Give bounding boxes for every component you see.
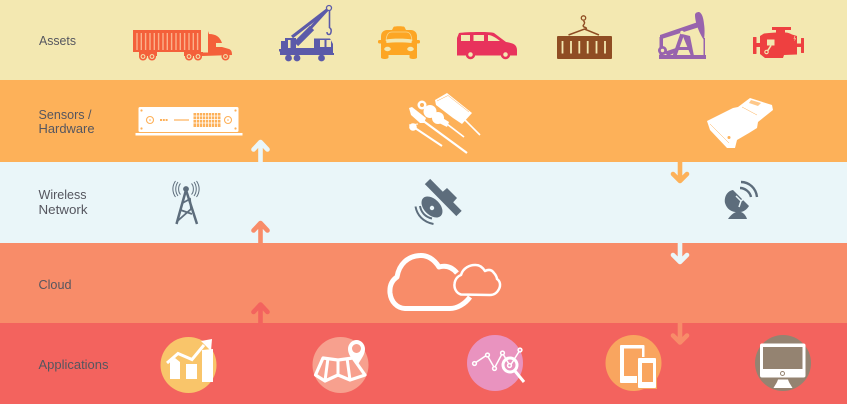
- label: sensors / hardware: [38, 108, 94, 136]
- icon: assorted sensors: [409, 93, 480, 153]
- arrow: down to applications: [673, 323, 687, 342]
- icon: satellite: [416, 182, 459, 224]
- arrow: up to sensors: [254, 142, 268, 162]
- label: sensors / hardware: Sensors /: [38, 108, 92, 122]
- arrow: up to wireless: [254, 223, 268, 243]
- band: sensors and hardware: [0, 80, 847, 162]
- icon: mobile crane: [279, 6, 334, 61]
- icon: hanging shipping container: [557, 16, 612, 59]
- icon: rack gateway device: [136, 107, 242, 136]
- band: wireless network: [0, 162, 847, 243]
- band: assets: [0, 0, 847, 80]
- icon: satellite dish: [725, 182, 757, 219]
- icon: handheld telematics unit: [707, 98, 773, 148]
- label: wireless network: Network: [38, 203, 88, 217]
- icon: tablet and phone: [606, 335, 662, 391]
- icon: growth chart: [160, 337, 216, 393]
- label: assets: Assets: [39, 34, 76, 48]
- label: applications: Applications: [38, 358, 108, 372]
- icon: map with pin: [312, 337, 368, 393]
- icon: desktop monitor: [755, 335, 811, 391]
- icon: container truck: [133, 30, 232, 60]
- icon: data analysis magnifier: [467, 335, 524, 391]
- label: wireless network: Wireless: [38, 188, 86, 202]
- label: wireless network: [38, 188, 88, 217]
- icon: cloud outlines: [390, 255, 500, 308]
- icon: radio tower: [173, 181, 199, 224]
- band: cloud: [0, 243, 847, 323]
- icon: van: [457, 32, 517, 59]
- icon: oil pump jack: [658, 12, 706, 59]
- icon: engine: [753, 27, 804, 58]
- icon: taxi: [378, 26, 420, 59]
- label: sensors / hardware: Hardware: [38, 122, 94, 136]
- arrow: up to cloud: [254, 304, 268, 323]
- band: applications: [0, 323, 847, 404]
- arrow: down to wireless: [673, 162, 687, 181]
- arrow: down to cloud: [673, 243, 687, 262]
- label: cloud: Cloud: [38, 278, 72, 292]
